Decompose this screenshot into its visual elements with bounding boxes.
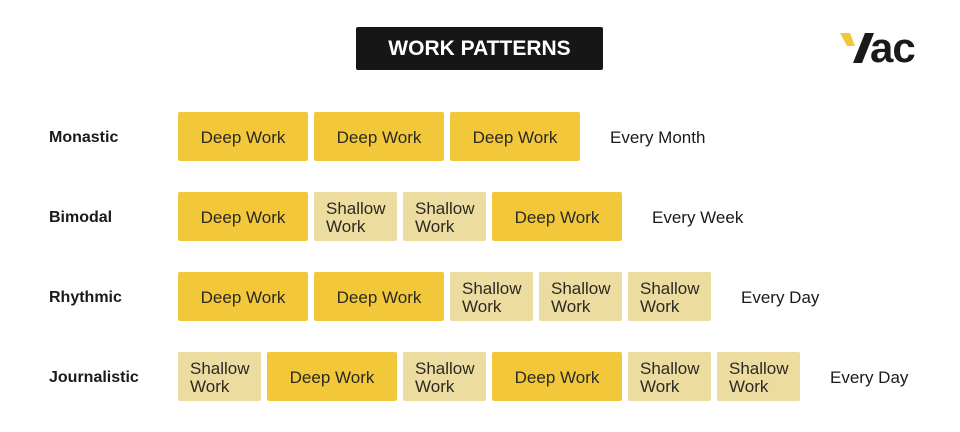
- row: Monastic: Every Month: [610, 128, 705, 147]
- logo: [840, 28, 915, 68]
- row: Bimodal: Deep Work: [515, 208, 599, 226]
- row: Bimodal: Bimodal: [49, 209, 112, 226]
- row: Rhythmic: Rhythmic: [49, 289, 122, 306]
- title: [356, 27, 603, 70]
- row: Journalistic: Shallow: [729, 358, 789, 378]
- row: Rhythmic: Deep Work: [201, 288, 285, 306]
- row: Rhythmic: Deep Work: [337, 288, 421, 306]
- row: Journalistic: Shallow: [190, 358, 250, 378]
- row: Monastic: Monastic: [49, 129, 118, 146]
- row: Rhythmic: Shallow: [640, 278, 700, 298]
- row: Bimodal: [49, 192, 744, 241]
- row: Journalistic: Deep Work: [290, 368, 374, 386]
- row: Bimodal: Shallow: [326, 198, 386, 218]
- row: Rhythmic: Work: [640, 296, 679, 316]
- row: Rhythmic: Every Day: [741, 288, 819, 307]
- row: Bimodal: Work: [415, 216, 454, 236]
- row: Monastic: Deep Work: [473, 128, 557, 146]
- row: Monastic: Deep Work: [201, 128, 285, 146]
- row: Journalistic: Every Day: [830, 368, 908, 387]
- row: Bimodal: Work: [326, 216, 365, 236]
- row: Journalistic: Journalistic: [49, 369, 139, 386]
- row: Rhythmic: [49, 272, 820, 321]
- row: Bimodal: Shallow: [415, 198, 475, 218]
- title: WORK PATTERNS: [388, 36, 571, 60]
- row: Journalistic: Work: [190, 376, 229, 396]
- row: Monastic: [49, 112, 705, 161]
- row: Monastic: Deep Work: [337, 128, 421, 146]
- row: Journalistic: Deep Work: [515, 368, 599, 386]
- row: Rhythmic: Shallow: [462, 278, 522, 298]
- row: Bimodal: Every Week: [652, 208, 743, 227]
- row: Journalistic: Work: [415, 376, 454, 396]
- row: Rhythmic: Work: [462, 296, 501, 316]
- row: Bimodal: Deep Work: [201, 208, 285, 226]
- row: Journalistic: Shallow: [415, 358, 475, 378]
- row: Journalistic: Work: [640, 376, 679, 396]
- row: Rhythmic: Work: [551, 296, 590, 316]
- row: Rhythmic: Shallow: [551, 278, 611, 298]
- row: Journalistic: [49, 352, 908, 401]
- row: Journalistic: Work: [729, 376, 768, 396]
- row: Journalistic: Shallow: [640, 358, 700, 378]
